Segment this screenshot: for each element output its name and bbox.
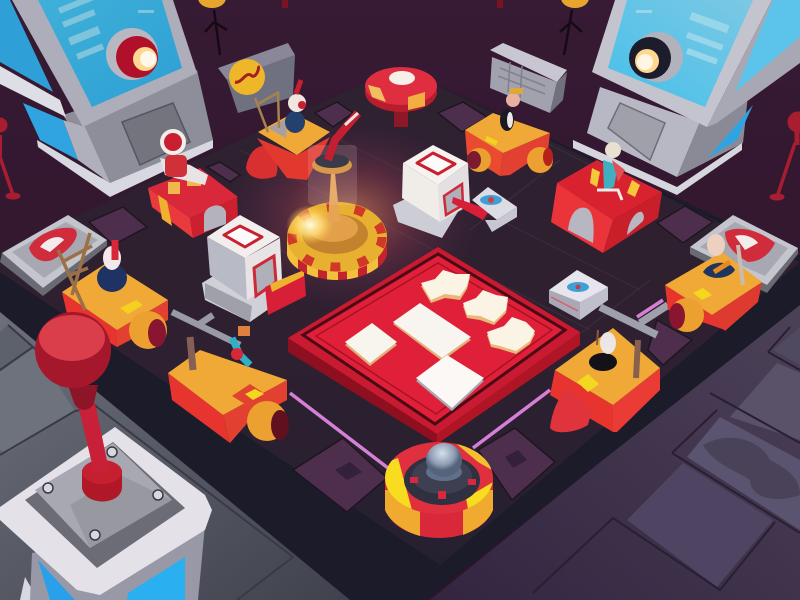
- small blue box right: [549, 270, 608, 320]
- grey server top right: [490, 43, 567, 113]
- top lamp posts: [198, 0, 589, 55]
- pink trim lines: [290, 300, 663, 468]
- grey tile with shield left: [0, 215, 107, 296]
- red joystick on pedestal: [0, 312, 212, 600]
- yellow station with balloon sign: [229, 59, 330, 180]
- grey server top left: [218, 43, 295, 113]
- yellow station bottom right with crane: [550, 305, 668, 432]
- white tiles and stars on the board: [345, 270, 535, 411]
- floor: right stone tiles: [430, 300, 800, 600]
- red box with figure right: [551, 142, 662, 253]
- right arcade machine: [573, 0, 800, 195]
- yellow station right with figure: [665, 234, 762, 332]
- yellow station left with rooster: [58, 233, 168, 349]
- white press left: [202, 215, 306, 322]
- trophy on pedestal: [286, 113, 387, 280]
- side barrier posts: [0, 112, 800, 200]
- yellow station bottom left with crane: [168, 312, 289, 443]
- left arcade machine: [0, 0, 213, 197]
- red mushroom table: [365, 67, 437, 127]
- white press centre: [393, 145, 517, 238]
- floor: left stone tiles: [0, 310, 360, 600]
- glow under trophy: [220, 120, 480, 310]
- bottom dome button: [385, 442, 493, 538]
- floor pads: [89, 102, 713, 512]
- grey tile with shield right: [690, 215, 798, 293]
- central red board: [288, 247, 580, 444]
- yellow station with penguin top right: [465, 88, 553, 176]
- red gift box with figure left: [148, 129, 238, 238]
